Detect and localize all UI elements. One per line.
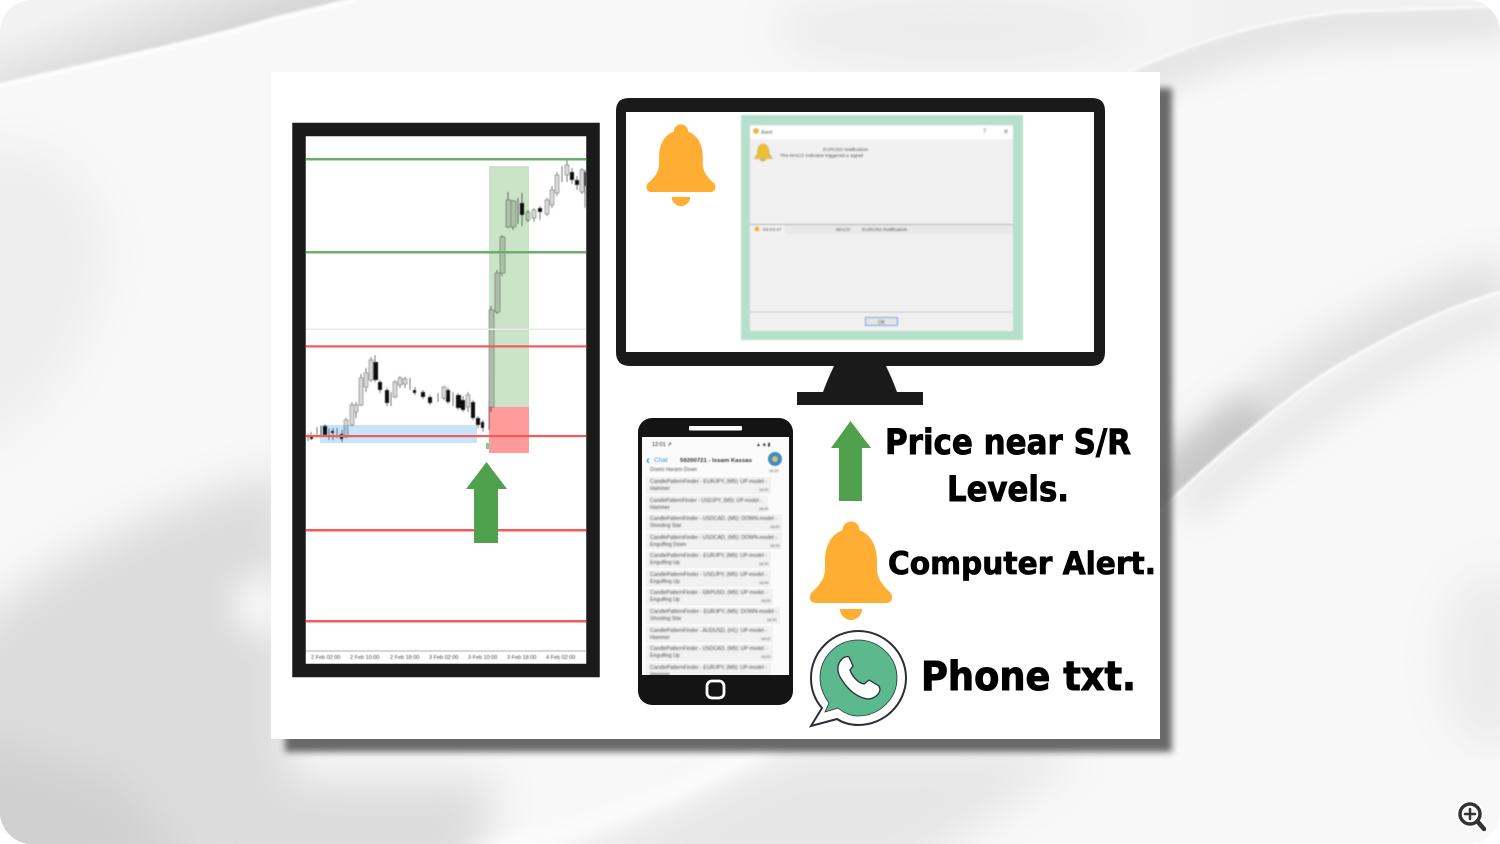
dialog list row [750, 224, 1013, 234]
phone message list: CandlePatternFinder - EURJPY, (M5): DOWN-model - [650, 609, 777, 615]
time axis: 2 Feb 02:00 [311, 655, 340, 661]
phone message list: Doses Harami Down [650, 467, 697, 473]
dialog OK button: OK [878, 320, 886, 326]
dialog message: The MACD indicator triggered a signal [780, 153, 863, 159]
phone message list: 16:20 [761, 655, 771, 659]
phone message list: Engulfing Down [650, 542, 686, 548]
phone message list: CandlePatternFinder - USDCAD, (M5): DOWN-model - [650, 535, 777, 541]
phone screen [642, 437, 789, 680]
icon: bell computer alert [810, 522, 892, 620]
alert dialog [741, 115, 1023, 340]
icon: whatsapp [811, 631, 906, 726]
dialog title bar: ✕ [1003, 129, 1009, 136]
phone message list: 16:20 [761, 637, 771, 641]
phone message list: Hammer [650, 672, 670, 678]
time axis: 3 Feb 10:00 [468, 655, 497, 661]
chart plot area [306, 158, 586, 661]
arrow: buy signal [466, 462, 507, 543]
phone message list: CandlePatternFinder - USDCAD, (M5): DOWN-model - [650, 516, 777, 522]
phone message list: CandlePatternFinder - AUDUSD, (H1): UP-model - [650, 628, 767, 634]
white card panel [271, 72, 1160, 739]
monitor screen and bezel [616, 98, 1105, 366]
dialog message: EURUSD Notification [823, 147, 868, 153]
time axis: 3 Feb 02:00 [429, 655, 458, 661]
phone status and chat header: Chat [654, 457, 668, 464]
time axis [306, 650, 586, 661]
heading: price near S/R levels: Price near S/R [885, 423, 1131, 463]
phone message list: CandlePatternFinder - USDJPY, (M5): UP-model - [650, 498, 762, 504]
phone message list: 16:20 [770, 544, 780, 548]
time axis: 2 Feb 10:00 [350, 655, 379, 661]
phone message list: CandlePatternFinder - GBPUSD, (M5): UP-model - [650, 590, 767, 596]
phone status and chat header: 59200721 - Issam Kassas [680, 458, 752, 464]
dialog title bar: ? [983, 129, 987, 135]
heading: price near S/R levels [885, 423, 1131, 510]
phone message list: 16:20 [769, 469, 779, 473]
phone status and chat header: 12:01 ⇗ [652, 442, 672, 448]
shadow of white card [285, 88, 1172, 752]
phone status and chat header: ‹ [646, 453, 650, 467]
phone status and chat header [646, 442, 782, 467]
dialog OK button [750, 312, 1013, 326]
signal marker [486, 443, 490, 449]
dialog list row: EURUSD Notification [862, 227, 907, 233]
label: computer alert: Computer Alert. [888, 546, 1156, 582]
blue consolidation zone [320, 425, 477, 443]
phone status and chat header: ▲ ◈ ▮ [756, 442, 771, 448]
monitor stand [797, 364, 923, 405]
panel: desktop monitor [616, 98, 1105, 405]
red stop loss zone [489, 407, 529, 453]
heading: price near S/R levels: Levels. [947, 470, 1069, 510]
time axis: 4 Feb 02:00 [546, 655, 575, 661]
panel: phone with messages [638, 418, 793, 705]
phone message list: 16:20 [759, 507, 769, 511]
phone message list: CandlePatternFinder - USDJPY, (M5): UP-model - [650, 572, 767, 578]
phone message list: 16:20 [759, 562, 769, 566]
dialog mint frame [741, 115, 1023, 340]
phone message list: Engulfing Up [650, 597, 680, 603]
dialog message [780, 147, 868, 159]
phone message list: CandlePatternFinder - EURJPY, (M5): UP-model - [650, 665, 767, 671]
phone message list: 16:20 [759, 581, 769, 585]
icon: zoom magnifier [1460, 804, 1484, 829]
arrow: price moves up [831, 421, 871, 501]
phone message list: Hammer [650, 635, 670, 641]
dialog title bar: Alert [761, 130, 773, 136]
dialog title bar [750, 126, 1013, 139]
green take profit zone [489, 166, 529, 407]
phone message list: CandlePatternFinder - USDCAD, (M5): UP-model - [650, 646, 767, 652]
phone speaker [689, 426, 742, 430]
dialog list row: 04:03:47 [763, 227, 782, 233]
time axis: 2 Feb 18:00 [390, 655, 419, 661]
phone message list: 16:20 [770, 525, 780, 529]
phone message list: Engulfing Up [650, 579, 680, 585]
phone message list: Shooting Star [650, 523, 682, 529]
phone home button [707, 681, 724, 698]
icon: gold bell in dialog [754, 144, 772, 161]
candlesticks [308, 160, 586, 442]
phone message list: Hammer [650, 486, 670, 492]
dialog list row: MACD [836, 227, 851, 233]
phone message list: 16:20 [759, 488, 769, 492]
time axis: 3 Feb 18:00 [507, 655, 536, 661]
phone message list: Engulfing Up [650, 560, 680, 566]
chart frame [299, 130, 593, 670]
phone message list: Engulfing Up [650, 653, 680, 659]
phone message list: CandlePatternFinder - EURJPY, (M5): UP-model - [650, 479, 767, 485]
phone message list [650, 467, 780, 678]
phone message list: 16:20 [761, 599, 771, 603]
dialog body [750, 125, 1013, 331]
panel: price chart [299, 130, 593, 670]
support and resistance lines [306, 158, 586, 622]
label: phone txt: Phone txt. [921, 654, 1136, 700]
phone body [638, 418, 793, 705]
phone message list: CandlePatternFinder - EURJPY, (M5): UP-model - [650, 553, 767, 559]
icon: bell on monitor [646, 124, 715, 206]
phone message list: Shooting Star [650, 616, 682, 622]
phone message list: Hammer [650, 505, 670, 511]
phone message list: 16:20 [767, 618, 777, 622]
